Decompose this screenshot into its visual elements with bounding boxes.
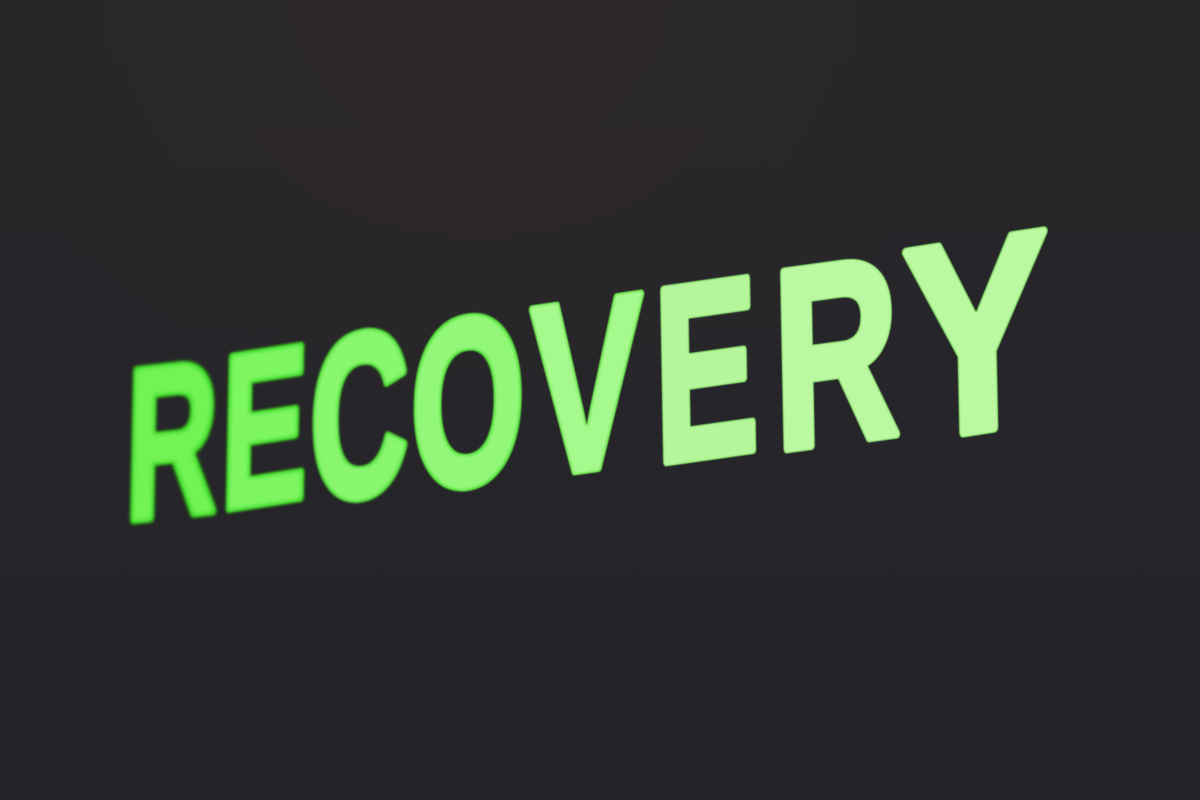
letter O: O bbox=[411, 262, 525, 541]
letter R: R bbox=[124, 314, 220, 567]
letter V: V bbox=[530, 241, 643, 530]
title: RECOVERY bbox=[124, 171, 1053, 567]
letter Y: Y bbox=[901, 171, 1053, 500]
letter E: E bbox=[219, 299, 310, 557]
letter E: E bbox=[652, 224, 761, 517]
letter C: C bbox=[309, 280, 410, 553]
letter R: R bbox=[770, 201, 902, 505]
